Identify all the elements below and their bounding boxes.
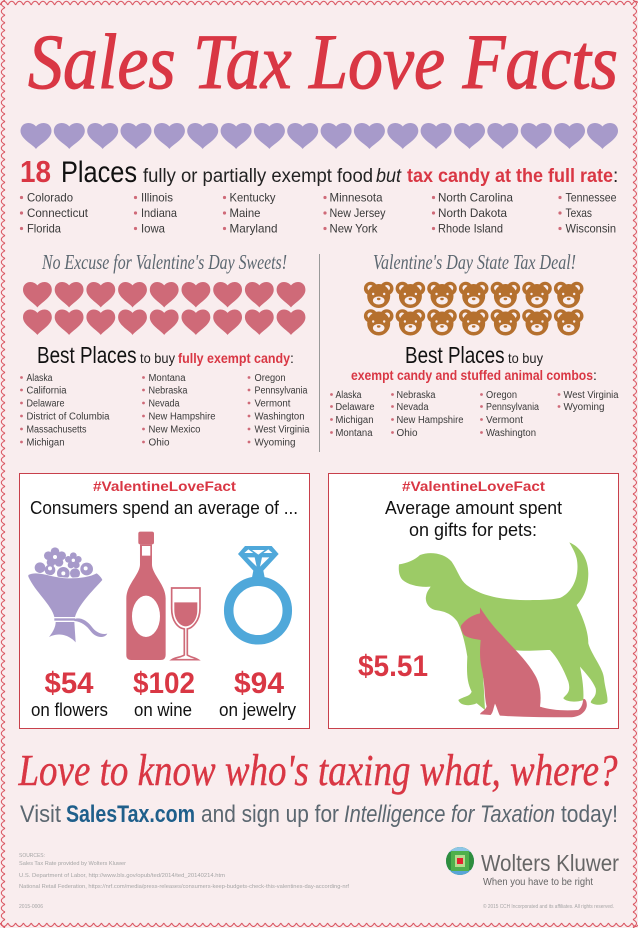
subheading: tax deal: Valentine's Day State Tax Deal! [373,250,576,274]
heading: 18 places: fully or partially exempt food [143,166,373,187]
list: exempt states [20,373,310,448]
list: combo states: Oregon [486,390,517,401]
heading: best places: Best Places [37,342,136,368]
list: combo states: West Virginia [564,390,619,401]
list: exempt states: Montana [148,373,186,384]
visit line: today! [561,801,618,828]
heading: best places combos: : [593,367,597,383]
heading: 18 places: Places [61,156,137,189]
list: 18 places states: Texas [566,206,592,220]
list: combo states: Pennsylvania [486,402,539,413]
list: 18 places states: Wisconsin [566,222,616,236]
list: 18 places states [20,190,617,236]
list: 18 places states: Indiana [141,206,177,220]
heading: best places [37,342,294,368]
list: combo states: Ohio [396,428,418,439]
list: combo states: Nebraska [396,390,436,401]
hashtag: #ValentineLoveFact [93,478,236,494]
icon: bouquet [28,547,107,642]
list: combo states: Michigan [336,415,374,426]
sources: 2015-0006 [19,904,43,910]
list: combo states: Montana [336,428,373,439]
heading: best places combos: Best Places [405,342,504,368]
list: exempt states: Delaware [26,398,65,410]
hashtag: #ValentineLoveFact [402,478,545,494]
stat: wine: $102 [133,667,195,700]
visit line: SalesTax.com [66,801,195,828]
list: 18 places states: North Dakota [438,206,507,220]
list: exempt states: Massachusetts [26,424,86,436]
panel heading: Average amount spent [385,498,562,518]
heading: best places combos [351,342,597,383]
list: exempt states: Washington [254,412,304,422]
panel: fully exempt candy [20,250,310,448]
stat: pets: $5.51 [358,650,428,683]
list: 18 places states: Rhode Island [438,222,503,236]
list: 18 places states: Colorado [27,190,73,204]
visit line: Visit [20,801,61,828]
list: combo states: Delaware [336,402,375,413]
sources: U.S. Department of Labor, http://www.bls.gov/opub/ted/2014/ted_20140214.htm [19,873,225,879]
heading: 18 places: tax candy at the full rate [407,166,613,187]
panel heading: on gifts for pets: [409,520,537,540]
list: exempt states: Wyoming [254,438,296,448]
list: exempt states: New Mexico [148,424,201,436]
list: 18 places states: Maryland [230,222,278,236]
list: combo states: New Hampshire [396,415,464,426]
list: 18 places states: New York [330,222,378,236]
list: exempt states: Michigan [26,438,64,448]
list: exempt states: Ohio [148,438,170,448]
list: 18 places states: Kentucky [230,190,276,204]
stat: wine [133,667,195,720]
heading: best places combos: to buy [508,350,543,366]
stat: jewelry: on jewelry [219,700,296,720]
list: 18 places states: Tennessee [566,190,617,204]
panel: consumers spend [20,474,310,728]
panel: state tax deal [330,250,619,439]
list: 18 places states: Maine [230,206,261,220]
list: exempt states: Nebraska [148,386,188,396]
stat: wine: on wine [134,700,192,720]
subheading: sweets: No Excuse for Valentine's Day Sweets! [41,250,287,274]
list: exempt states: Vermont [254,398,291,410]
row of purple hearts [20,123,618,149]
stat: flowers [31,667,108,720]
list: 18 places states: Florida [27,222,61,236]
list: combo states: Wyoming [564,402,604,413]
list: exempt states: California [26,386,67,396]
logo: Wolters Kluwer: When you have to be right [483,877,593,888]
red hearts grid [23,282,305,335]
stat: flowers: on flowers [31,700,108,720]
list: 18 places states: New Jersey [330,206,386,220]
visit line: Intelligence for Taxation [344,801,555,828]
list: exempt states: New Hampshire [148,412,216,422]
list: exempt states: Oregon [254,373,286,384]
panel heading [385,498,562,540]
list: exempt states: District of Columbia [26,412,110,422]
teddy bears grid [364,282,584,336]
list: combo states: Alaska [336,390,362,401]
copyright: © 2015 CCH Incorporated and its affiliates. All rights reserved. [483,903,614,910]
icon: globe mosaic [446,847,474,875]
sources: National Retail Federation, https://nrf.com/media/press-releases/consumers-keep-budgets-check-this-valentines-day-according-nrf [19,884,349,890]
list: 18 places states: Iowa [141,222,165,236]
heading: best places: : [290,350,294,366]
list: exempt states: Nevada [148,398,180,410]
list: combo states: Washington [486,428,536,439]
list: 18 places states: Connecticut [27,206,89,220]
stat: flowers: $54 [44,667,94,700]
visit line: and sign up for [201,801,339,828]
list: exempt states: West Virginia [254,424,310,436]
heading: 18 places: but [376,166,402,187]
list: combo states: Vermont [486,415,523,426]
list: 18 places states: North Carolina [438,190,513,204]
list: exempt states: Pennsylvania [254,386,308,396]
panel: pet gifts [328,474,618,728]
logo: Wolters Kluwer: Wolters Kluwer [481,850,619,876]
panel heading: Consumers spend an average of ... [30,498,298,518]
icon: dog silhouette [399,542,607,710]
icon: diamond ring [229,546,287,640]
list: 18 places states: Illinois [141,190,173,204]
list: exempt states: Alaska [26,373,53,384]
visit line [20,801,618,828]
sources [19,853,349,910]
heading: best places: fully exempt candy [178,350,290,366]
stat: jewelry: $94 [234,667,284,700]
icon: cat silhouette [461,607,587,717]
list: combo states: Nevada [396,402,429,413]
heading: 18 places [20,154,618,189]
sources: Sales Tax Rate provided by Wolters Kluwer [19,861,126,867]
icon: wine bottle and glass [126,532,200,660]
list: 18 places states: Minnesota [330,190,383,204]
stat: jewelry [219,667,296,720]
heading: best places combos: exempt candy and stuffed animal combos [351,367,593,383]
sources: SOURCES: [19,853,45,859]
list: combo states [330,390,619,439]
heading: 18 places: 18 [20,154,51,189]
heading: 18 places: : [613,166,618,187]
heading: best places: to buy [140,350,175,366]
logo: Wolters Kluwer [446,847,619,888]
